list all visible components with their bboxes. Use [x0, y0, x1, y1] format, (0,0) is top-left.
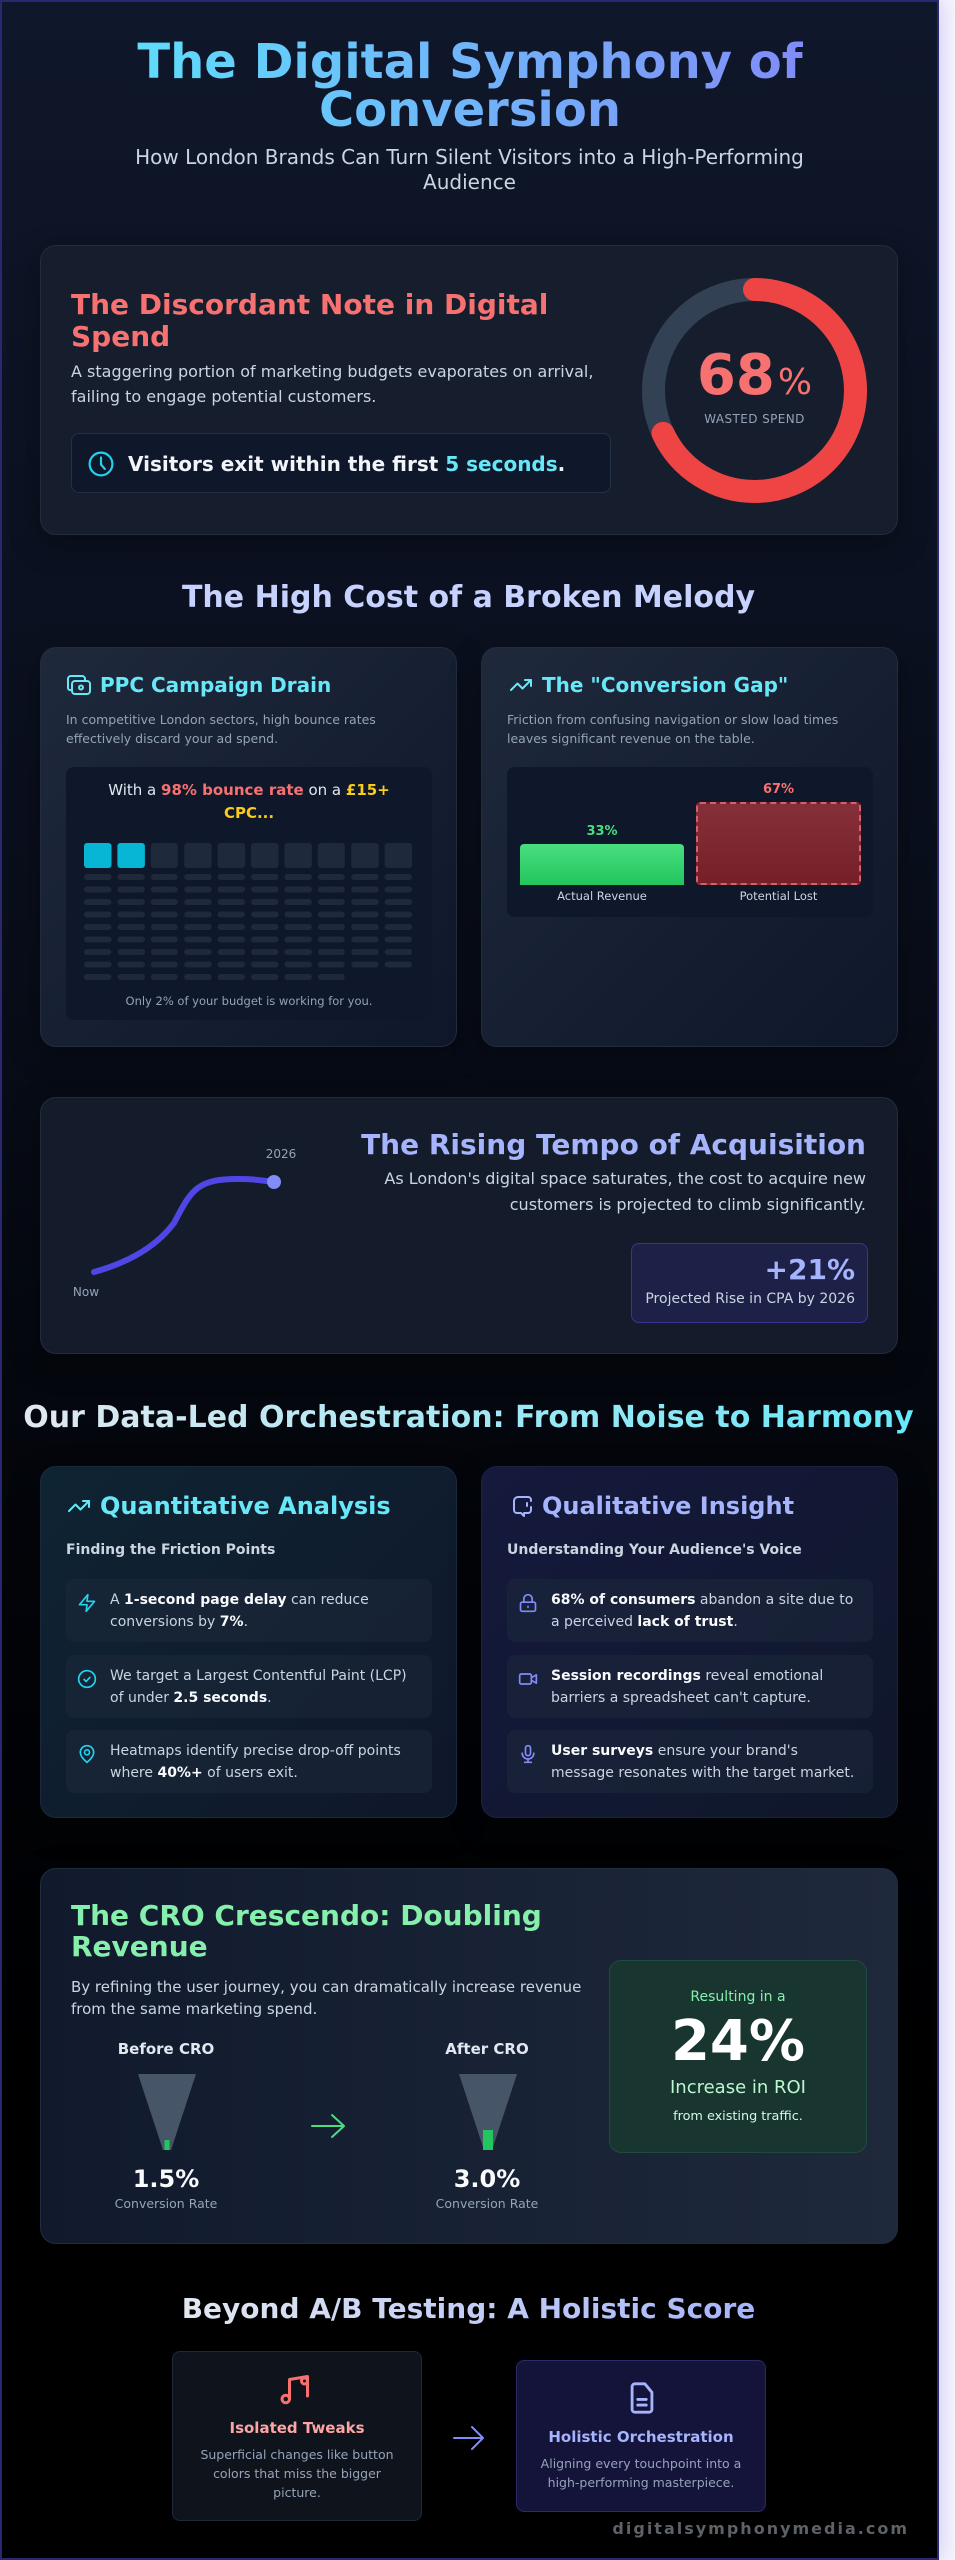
section heading: broken melody: The High Cost of a Broken Melody [182, 580, 755, 615]
donut value: 68% [697, 343, 812, 408]
card title: Qualitative Insight [542, 1492, 794, 1520]
icon: video [518, 1673, 538, 1685]
funnel graphic [459, 2074, 517, 2150]
title: Conversion [319, 82, 621, 138]
stat box [631, 1243, 868, 1323]
card text [66, 712, 376, 746]
heading [71, 288, 548, 353]
section heading: orchestration: Our Data-Led Orchestration: From Noise to Harmony [23, 1400, 914, 1435]
arrow [311, 2114, 345, 2138]
card text: effectively discard your ad spend. [66, 731, 278, 746]
bar: potential lost [696, 802, 861, 885]
heading: The CRO Crescendo: Doubling [71, 1899, 542, 1932]
item text [110, 1592, 369, 1630]
item text: where 40%+ of users exit. [110, 1765, 298, 1781]
item text [551, 1592, 853, 1630]
arrow [454, 2423, 484, 2453]
text block: failing to engage potential customers. [71, 387, 376, 406]
curve [91, 1175, 281, 1275]
card text: picture. [273, 2485, 321, 2500]
stat value: +21% [765, 1253, 855, 1286]
waffle headline: With a 98% bounce rate on a £15+ [108, 781, 390, 799]
item text [110, 1743, 401, 1781]
panel: holistic orchestration [516, 2360, 766, 2512]
item text: barriers a spreadsheet can't capture. [551, 1690, 811, 1706]
panel: qualitative insight [481, 1466, 898, 1818]
heading: The Discordant Note in Digital [71, 288, 548, 321]
item text [551, 1668, 823, 1706]
card text: Friction from confusing navigation or slow load times [507, 712, 838, 727]
card text: Superficial changes like button [200, 2447, 394, 2462]
waffle grid [84, 843, 412, 980]
stat label: Projected Rise in CPA by 2026 [645, 1291, 855, 1307]
icon: clock [88, 452, 114, 476]
item text: We target a Largest Contentful Paint (LCP) [110, 1668, 407, 1684]
icon: map pin [80, 1744, 94, 1764]
item: trust [507, 1579, 873, 1642]
text block: As London's digital space saturates, the cost to acquire new [384, 1169, 866, 1188]
item text: Session recordings reveal emotional [551, 1668, 823, 1684]
icon: file text [625, 2381, 659, 2415]
item text: A 1-second page delay can reduce [110, 1592, 369, 1608]
bar axis label: Actual Revenue [557, 889, 647, 903]
heading: Revenue [71, 1930, 208, 1963]
icon: music note [279, 2372, 315, 2408]
bar: actual revenue [520, 844, 684, 885]
funnel: before cro [115, 2040, 217, 2211]
item text: message resonates with the target market. [551, 1765, 854, 1781]
icon: trending up [510, 679, 532, 691]
card text: Aligning every touchpoint into a [541, 2456, 741, 2471]
callout [71, 433, 611, 493]
bar label: 67%: 67% [763, 782, 794, 797]
panel: quantitative analysis [40, 1466, 457, 1818]
waffle caption: Only 2% of your budget is working for you. [126, 994, 372, 1008]
subtitle: Audience [423, 170, 516, 194]
heading: Spend [71, 320, 170, 353]
item text: conversions by 7%. [110, 1614, 248, 1630]
panel: isolated tweaks [172, 2351, 422, 2521]
card title: Holistic Orchestration [548, 2428, 734, 2446]
subtitle: How London Brands Can Turn Silent Visitors into a High-Performing [135, 145, 804, 169]
icon: banknotes [67, 675, 91, 695]
bar chart [507, 767, 873, 917]
text block: A staggering portion of marketing budgets evaporates on arrival, [71, 362, 593, 381]
stat lead-in: Resulting in a [690, 1989, 786, 2005]
donut ring [642, 278, 867, 503]
funnel graphic [138, 2074, 196, 2150]
item text [110, 1668, 407, 1706]
item text: Heatmaps identify precise drop-off points [110, 1743, 401, 1759]
stat value: 24% [671, 2009, 805, 2074]
card subtitle: Understanding Your Audience's Voice [507, 1542, 802, 1558]
chart label: 2026: 2026 [266, 1147, 296, 1161]
heading: The Rising Tempo of Acquisition [361, 1128, 866, 1161]
title: The Digital Symphony of [137, 34, 803, 90]
callout text: Visitors exit within the first 5 seconds. [128, 452, 565, 476]
waffle headline: CPC... [224, 804, 274, 822]
funnel caption: Conversion Rate [115, 2196, 217, 2211]
stat note: from existing traffic. [673, 2109, 803, 2124]
icon: message [513, 1496, 532, 1517]
icon: trending up [68, 1500, 90, 1512]
icon: check circle [78, 1670, 96, 1688]
text block [71, 1978, 581, 2018]
item: surveys [507, 1730, 873, 1793]
icon: microphone [521, 1744, 535, 1764]
funnel label: Before CRO [118, 2040, 214, 2058]
item text: User surveys ensure your brand's [551, 1743, 798, 1759]
panel: discordant note [40, 245, 898, 535]
budget waffle [66, 767, 432, 1020]
item: lcp [66, 1655, 432, 1718]
waffle headline [108, 781, 390, 822]
text block: By refining the user journey, you can dramatically increase revenue [71, 1978, 581, 1996]
funnel caption: Conversion Rate [436, 2196, 538, 2211]
panel: ppc campaign drain [40, 647, 457, 1047]
subtitle [135, 145, 804, 194]
watermark: digitalsymphonymedia.com [612, 2519, 909, 2538]
bar label: 33%: 33% [586, 824, 618, 839]
card text [173, 2445, 421, 2502]
funnel value: 1.5% [133, 2165, 199, 2193]
panel: rising tempo [40, 1097, 898, 1354]
heading [71, 1899, 542, 1963]
stat label: Increase in ROI [670, 2077, 806, 2098]
panel: conversion gap [481, 647, 898, 1047]
card subtitle: Finding the Friction Points [66, 1542, 275, 1558]
card text: high-performing masterpiece. [548, 2475, 734, 2490]
funnel label: After CRO [445, 2040, 529, 2058]
donut label: WASTED SPEND [704, 412, 805, 426]
icon: lock [520, 1594, 536, 1612]
icon: zap [78, 1594, 96, 1612]
item: heatmaps [66, 1730, 432, 1793]
card title: The "Conversion Gap" [542, 673, 788, 697]
panel: cro crescendo [40, 1868, 898, 2244]
card text [517, 2454, 765, 2492]
bar axis label: Potential Lost [740, 889, 817, 903]
item text: 68% of consumers abandon a site due to [551, 1592, 853, 1608]
title [137, 34, 803, 138]
item text: of under 2.5 seconds. [110, 1690, 272, 1706]
text block: from the same marketing spend. [71, 2000, 317, 2018]
card text: In competitive London sectors, high bounce rates [66, 712, 376, 727]
line chart: rising cpa [73, 1147, 296, 1299]
card text [507, 712, 838, 746]
text block [384, 1169, 866, 1214]
chart label: now: Now [73, 1285, 99, 1299]
text block: customers is projected to climb significantly. [510, 1195, 866, 1214]
card text: colors that miss the bigger [213, 2466, 381, 2481]
funnel: after cro [436, 2040, 538, 2211]
section heading: holistic score: Beyond A/B Testing: A Holistic Score [182, 2292, 755, 2325]
card title: PPC Campaign Drain [100, 673, 331, 697]
card title: Quantitative Analysis [100, 1492, 391, 1520]
card text: leaves significant revenue on the table. [507, 731, 755, 746]
item text [551, 1743, 854, 1781]
chart: donut 68% wasted spend [642, 278, 867, 503]
funnel value: 3.0% [454, 2165, 520, 2193]
item: recordings [507, 1655, 873, 1718]
card title: Isolated Tweaks [229, 2419, 365, 2437]
text block [71, 362, 593, 406]
item: page delay [66, 1579, 432, 1642]
stat box: roi [609, 1960, 867, 2153]
item text: a perceived lack of trust. [551, 1614, 738, 1630]
